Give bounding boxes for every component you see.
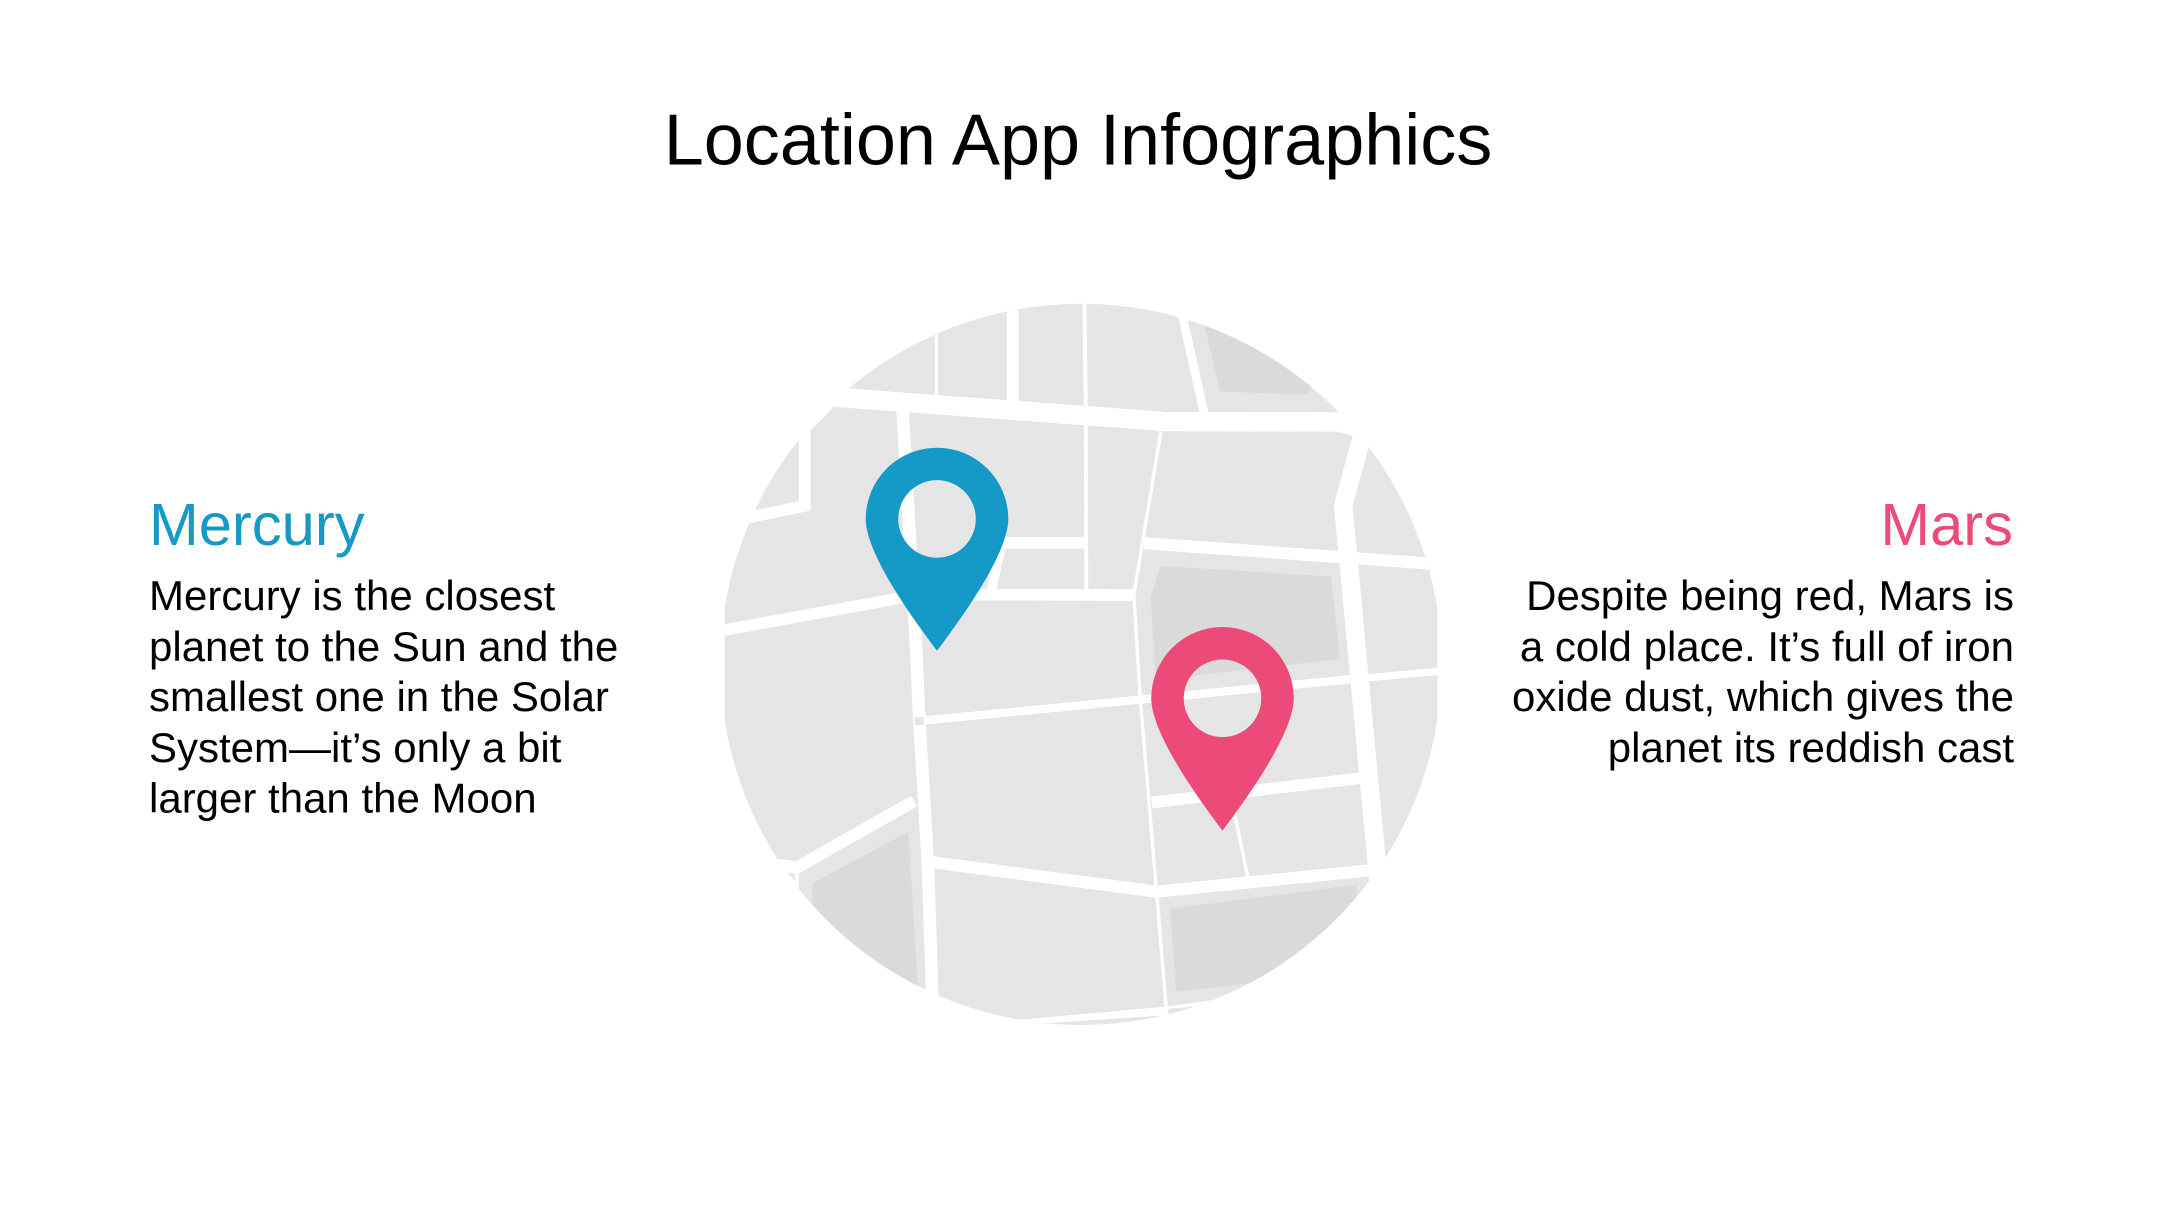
text block: Mars description: a cold place. It’s full of iron [1520, 623, 2014, 670]
text block: Mars description [1512, 572, 2014, 771]
text block: Mercury description: planet to the Sun and the [149, 623, 618, 670]
heading: Mercury: Mercury [149, 491, 365, 558]
icon: pink location pin [1151, 627, 1294, 831]
circular street map [724, 304, 1438, 1025]
text block: Mercury description: System—it’s only a bit [149, 724, 562, 771]
text block: Mars description: oxide dust, which gives the [1512, 673, 2014, 720]
panel: Mars [1512, 491, 2014, 771]
text block: Mercury description: larger than the Moon [149, 774, 537, 822]
icon: blue location pin [866, 448, 1008, 651]
heading: Mars: Mars [1880, 491, 2013, 558]
text block: Mercury description: smallest one in the Solar [149, 673, 609, 720]
text block: Mars description: planet its reddish cast [1608, 724, 2014, 771]
title: Location App Infographics [664, 100, 1492, 180]
map with location pins [724, 304, 1438, 1025]
text block: Mercury description [149, 572, 618, 822]
panel: Mercury [149, 491, 618, 822]
text block: Mercury description: Mercury is the closest [149, 572, 555, 619]
text block: Mars description: Despite being red, Mars is [1526, 572, 2014, 619]
